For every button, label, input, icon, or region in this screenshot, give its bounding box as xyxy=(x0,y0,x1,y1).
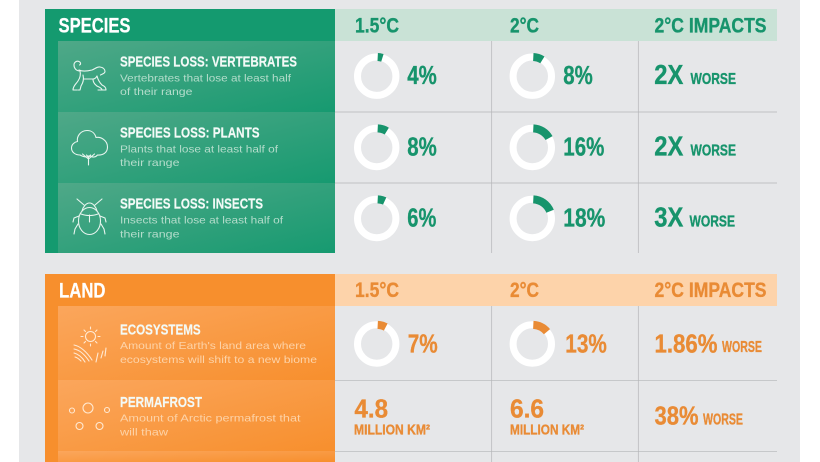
impact 2X worse xyxy=(654,130,736,162)
column heading 2C impacts: 2°C IMPACTS xyxy=(654,279,766,302)
impact 1.86% worse: 1.86% xyxy=(654,328,718,358)
impact 2X worse xyxy=(654,59,736,90)
land left block xyxy=(45,274,335,462)
impact 3X worse: WORSE xyxy=(690,214,735,230)
value 13%: 13% xyxy=(565,328,607,358)
title: SPECIES LOSS: INSECTS xyxy=(120,195,263,212)
value 4%: 4% xyxy=(407,60,437,90)
species heading: SPECIES xyxy=(58,15,130,38)
row: plants xyxy=(58,112,335,183)
impact 1.86% worse xyxy=(654,328,762,358)
column heading 1.5C: 1.5°C xyxy=(355,279,399,302)
value 16%: 16% xyxy=(563,131,604,161)
description: of their range xyxy=(120,86,193,98)
impact 3X worse xyxy=(654,202,735,232)
value 8%: 8% xyxy=(563,60,593,90)
value 6%: 6% xyxy=(407,203,436,233)
donut: vertebrates 1.5C 4% xyxy=(357,56,397,96)
species left block xyxy=(45,9,335,253)
row: vertebrates xyxy=(58,41,335,112)
column heading 2C: 2°C xyxy=(510,14,539,38)
value 7%: 7% xyxy=(408,328,438,358)
description: will thaw xyxy=(119,426,168,438)
title: SPECIES LOSS: VERTEBRATES xyxy=(120,53,297,70)
description: Amount of Arctic permafrost that xyxy=(120,412,301,424)
land heading: LAND xyxy=(59,279,106,302)
icon: tree xyxy=(72,130,108,165)
description xyxy=(119,412,301,438)
icon: sun and field xyxy=(74,327,106,362)
impact 38% worse: WORSE xyxy=(703,412,743,428)
value 4.8 million km2: MILLION KM² xyxy=(354,423,430,439)
description: Amount of Earth's land area where xyxy=(120,340,306,352)
column heading 2C: 2°C xyxy=(510,279,539,302)
impact 2X worse: WORSE xyxy=(690,71,736,88)
species column header band xyxy=(335,9,777,41)
value 6.6 million km2: 6.6 xyxy=(510,394,544,424)
row: permafrost xyxy=(58,380,335,451)
section: land xyxy=(45,274,777,462)
donut: vertebrates 2C 8% xyxy=(512,56,552,96)
impact 38% worse: 38% xyxy=(654,401,698,431)
donut: ecosystems 1.5C 7% xyxy=(357,324,397,364)
impact 1.86% worse: WORSE xyxy=(722,339,762,356)
donut: plants 2C 16% xyxy=(512,127,552,168)
value 6.6 million km2 xyxy=(510,394,584,439)
row: next land row (cropped) xyxy=(58,451,335,462)
title: PERMAFROST xyxy=(120,394,202,411)
impact 2X worse: 2X xyxy=(654,130,684,162)
impact 2X worse: WORSE xyxy=(690,142,736,160)
impact 38% worse xyxy=(654,401,743,431)
row: insects xyxy=(58,183,335,253)
description: their range xyxy=(120,228,180,240)
donut: ecosystems 2C 13% xyxy=(512,324,552,364)
donut: insects 2C 18% xyxy=(512,198,552,239)
description xyxy=(120,340,317,366)
description xyxy=(120,214,283,240)
description: their range xyxy=(120,157,180,169)
value 18%: 18% xyxy=(563,203,605,233)
icon: monkey xyxy=(73,61,106,90)
description: Insects that lose at least half of xyxy=(120,214,283,226)
description: Vertebrates that lose at least half xyxy=(120,72,291,84)
description xyxy=(120,144,278,169)
donut: insects 1.5C 6% xyxy=(357,198,397,239)
title: SPECIES LOSS: PLANTS xyxy=(120,125,260,142)
section: species xyxy=(45,9,777,253)
column heading 2C impacts: 2°C IMPACTS xyxy=(654,14,766,38)
description: Plants that lose at least half of xyxy=(120,144,278,156)
description xyxy=(120,72,291,98)
value 4.8 million km2 xyxy=(354,394,430,439)
value 4.8 million km2: 4.8 xyxy=(354,394,388,424)
column heading 1.5C: 1.5°C xyxy=(355,14,399,38)
description: ecosystems will shift to a new biome xyxy=(120,354,317,366)
donut: plants 1.5C 8% xyxy=(357,127,397,168)
icon: thaw circles xyxy=(70,403,110,430)
land column header band xyxy=(335,274,777,306)
value 8%: 8% xyxy=(407,131,437,161)
impact 2X worse: 2X xyxy=(654,59,684,90)
row: ecosystems xyxy=(58,306,335,380)
title: ECOSYSTEMS xyxy=(120,322,201,338)
impact 3X worse: 3X xyxy=(654,202,684,232)
value 6.6 million km2: MILLION KM² xyxy=(510,423,584,439)
icon: beetle xyxy=(73,199,106,234)
